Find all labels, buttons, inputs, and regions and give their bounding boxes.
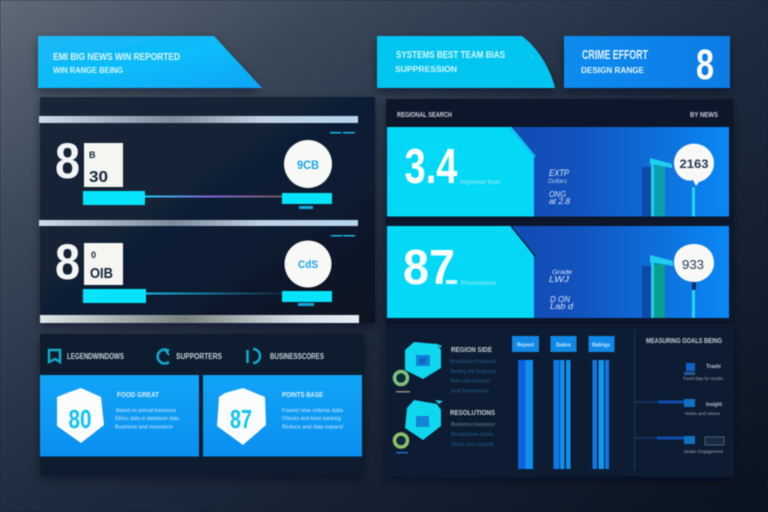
row 2 metric: CdS [298,259,318,271]
hexagon item 2: Business insurance [451,422,495,428]
header box with figure: 8 [696,41,714,89]
header box with figure [564,36,730,89]
row 2 metric: OIB [90,265,113,282]
score card 1: FOOD GREAT [117,390,159,399]
legend item 1: LEGENDWINDOWS [67,352,125,361]
header tab: middle [377,36,555,88]
header box with figure: CRIME EFFORT [582,48,648,62]
metric card 1: 3.4 [404,140,458,194]
legend item 3 [248,349,325,363]
hexagon item 1: Dealing the business [450,369,496,375]
score card 1: 80 [68,404,92,434]
legend item 2: SUPPORTERS [176,352,223,361]
panel: right metrics [386,99,733,325]
list item 3 [635,436,724,454]
row 1 metric [39,116,358,209]
hexagon item 2: Breakdown team [451,432,493,438]
metric card 1: Dollars [548,179,567,185]
hexagon item 2: Sales and reports [451,442,495,448]
row 1 metric: 30 [89,169,108,186]
hexagon item 1 [394,342,496,394]
list item 1: Trade [706,364,721,370]
metric card 2: Grade [552,270,573,276]
column 3: Ratings [592,342,610,348]
right legend list: MEASURING GOALS BEING [646,338,722,345]
metric card 2: 87 [403,241,455,295]
score card 1: Ethics data in database data [115,416,179,422]
header tab: left: EMI BIG NEWS WIN REPORTED [53,52,180,63]
metric card 2: Lab d [550,302,574,311]
hexagon item 1: REGION SIDE [451,347,492,354]
panel heading: REGIONAL SEARCH [397,112,452,119]
header box with figure: DESIGN RANGE [581,65,644,75]
panel heading [397,112,718,119]
header tab: middle: SUPPRESSION [395,65,457,74]
panel: left metrics [39,97,375,323]
header tab: middle: SYSTEMS BEST TEAM BIAS [396,49,505,61]
header tab: left [38,36,262,88]
list item 2 [635,399,722,416]
hexagon item 2: RESOLUTIONS [450,410,495,417]
row 2 metric: 8 [55,234,80,290]
legend item 1 [49,350,125,362]
row 1 metric: B [89,150,96,160]
row 2 metric [39,220,359,323]
hexagon item 2 [394,400,495,454]
metric card 2 [387,226,729,318]
metric card 1: at 2.8 [549,197,571,206]
header tab: left: WIN RANGE BEING [53,65,123,75]
list item 3: Dealer Engagement [684,449,724,454]
score card 2: 87 [230,404,252,434]
score card 1 [40,375,199,456]
row 1 metric: 8 [55,133,80,189]
panel: legend and score cards [40,334,364,475]
column chart [512,336,614,469]
score card 2: Checks and team banking [282,416,341,422]
score card 2: Found new criteria data [282,408,343,414]
panel heading: BY NEWS [690,112,718,119]
list item 2: Insight [706,402,722,408]
metric card 2: LWJ [549,275,570,284]
score card 1: Business and insurance [115,424,173,430]
legend item 2 [158,350,223,364]
metric card 1 [387,127,729,216]
score card 2: Reduce and data expand [282,424,343,430]
metric card 2: Promotions [461,281,496,287]
hexagon item 1: Team and evidence [450,378,490,384]
legend item 3: BUSINESSCORES [270,352,325,361]
row 1 metric: 9CB [297,158,319,172]
hexagon item 1: 8! [419,357,427,366]
hexagon item 1: Breakdown of business [450,359,496,365]
metric card 1: EXTP [549,168,569,178]
metric card 1: ONG [549,190,566,199]
column 1: Report [517,342,534,348]
row 2 metric: 0 [91,250,96,260]
hexagon item 1: and framework [451,388,490,394]
list item 2: Notes and values [685,411,721,416]
score card 1: Based on annual insurance [116,408,176,414]
score card 2: POINTS BASE [282,390,323,399]
right legend list [634,329,724,470]
metric card 1: Improved from [460,180,500,186]
column 2: Sales [556,342,571,348]
score card 2 [203,375,362,456]
list item 1 [683,363,724,381]
panel: right lower breakdown [386,325,734,477]
metric card 2: 933 [682,257,704,272]
metric card 1: 2163 [680,157,709,171]
list item 1: Trend data for results [683,376,724,381]
metric card 2: D ON [550,295,570,304]
